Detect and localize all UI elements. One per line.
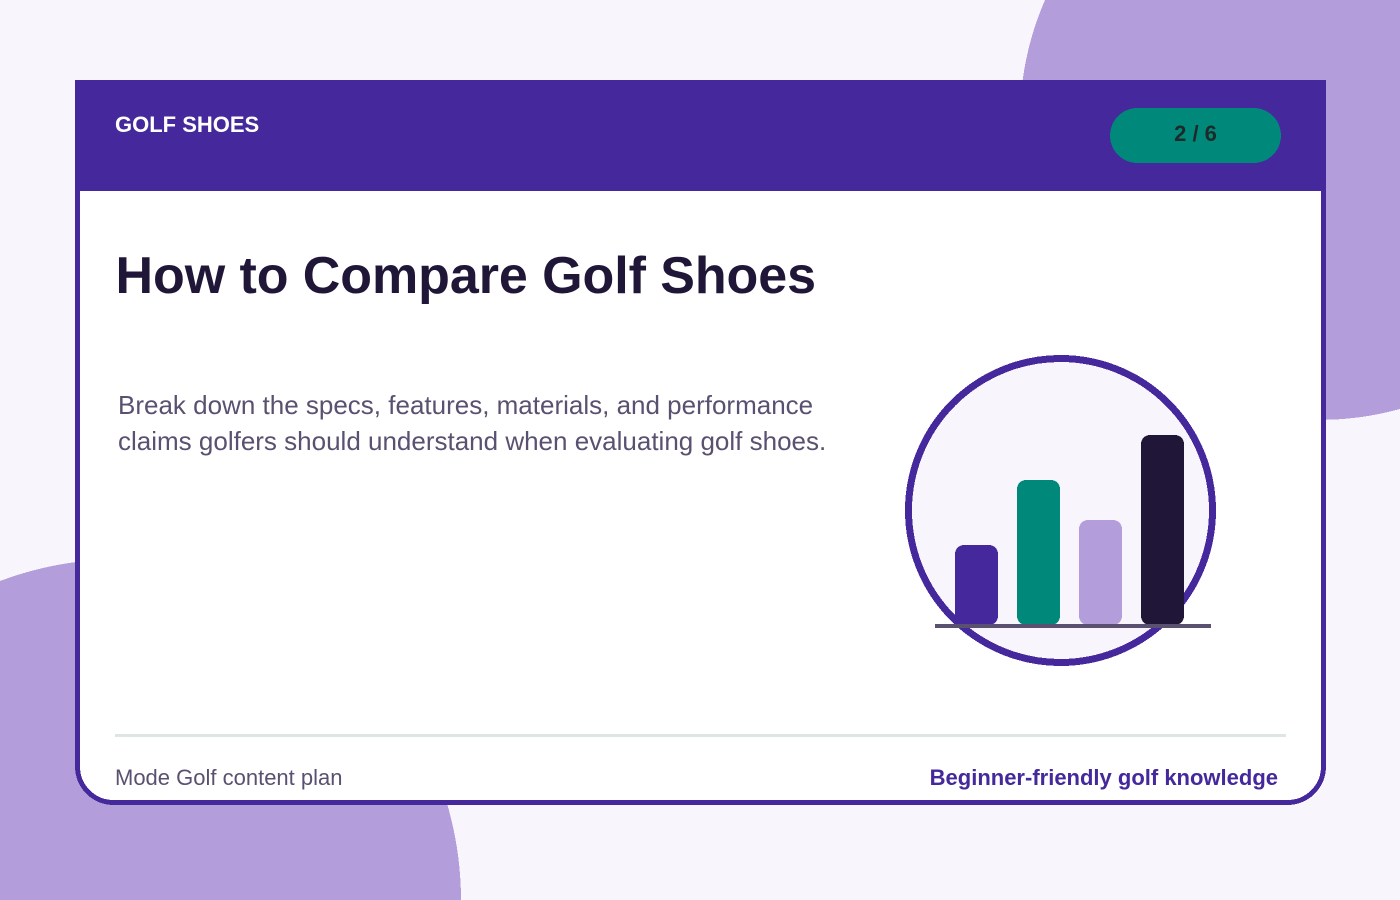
page badge — [1110, 108, 1281, 163]
bar 2 — [1017, 480, 1060, 625]
bar 3 — [1079, 520, 1122, 625]
chart baseline — [935, 624, 1211, 628]
footer divider — [115, 734, 1286, 737]
bar 4 — [1141, 435, 1184, 625]
bar 1 — [955, 545, 998, 625]
page number: 2 / 6 — [1174, 121, 1217, 146]
header label: GOLF SHOES — [115, 112, 259, 137]
description line 2: claims golfers should understand when evaluating golf shoes. — [118, 426, 826, 456]
card panel — [78, 82, 1324, 802]
title: How to Compare Golf Shoes — [116, 247, 816, 305]
footer right text: Beginner-friendly golf knowledge — [930, 765, 1278, 790]
circle backdrop — [908, 358, 1212, 662]
footer left text: Mode Golf content plan — [115, 765, 342, 790]
header band — [75, 80, 1326, 191]
description line 1: Break down the specs, features, materials, and performance — [118, 390, 813, 420]
background blob: bottom left — [0, 559, 461, 900]
background blob: top right — [1020, 0, 1400, 420]
